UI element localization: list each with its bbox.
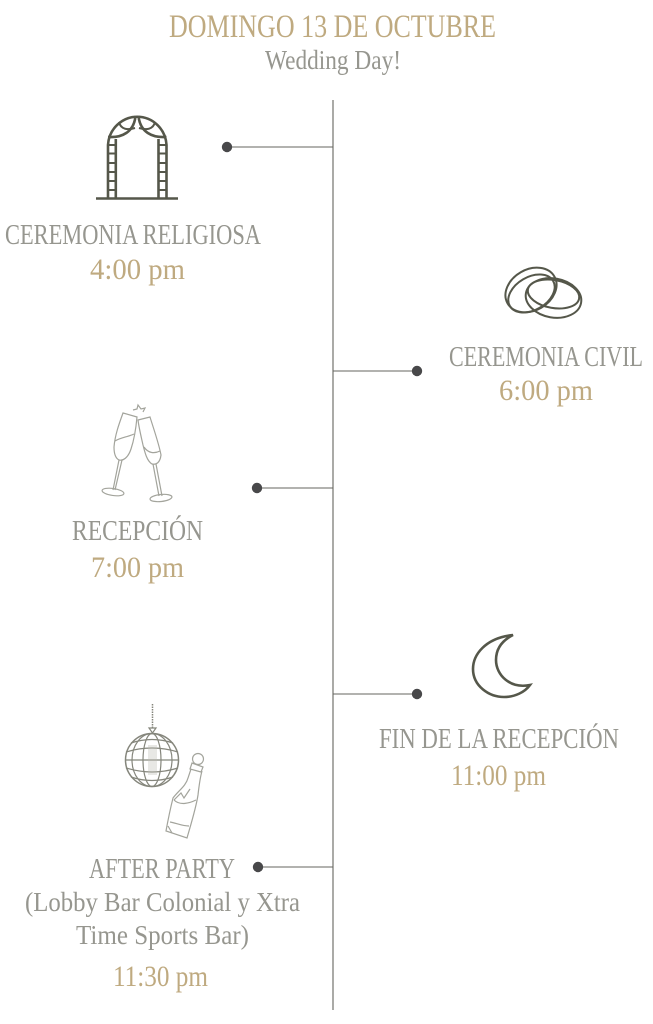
title: DOMINGO 13 DE OCTUBRE — [169, 9, 496, 45]
connector and dot — [222, 142, 333, 152]
label: recepcion: RECEPCIÓN — [72, 516, 203, 547]
panel: fin de la recepcion — [333, 635, 619, 792]
label: ceremonia religiosa: CEREMONIA RELIGIOSA — [5, 220, 262, 251]
connector and dot — [253, 862, 333, 872]
icon: champagne bottle — [166, 754, 204, 838]
icon: wedding rings — [497, 259, 584, 322]
timeline vertical axis — [332, 100, 334, 1010]
time: 4:00 pm: 4:00 pm — [90, 253, 185, 286]
panel: recepcion — [72, 405, 333, 584]
icon: wedding arch — [96, 116, 178, 198]
panel: ceremonia civil — [333, 259, 643, 407]
location line 1: (Lobby Bar Colonial y Xtra — [25, 887, 300, 917]
connector and dot — [333, 689, 422, 699]
location line 2: Time Sports Bar) — [76, 920, 249, 950]
panel: ceremonia religiosa — [5, 116, 333, 286]
connector and dot — [333, 366, 422, 376]
time: 11:30 pm: 11:30 pm — [113, 960, 208, 993]
time: 6:00 pm: 6:00 pm — [499, 374, 593, 407]
label: after party: AFTER PARTY — [89, 854, 235, 885]
subtitle: Wedding Day! — [265, 45, 401, 75]
icon: champagne flutes — [102, 405, 172, 503]
time: 11:00 pm: 11:00 pm — [451, 759, 546, 792]
icon: crescent moon — [473, 635, 530, 697]
icon: disco ball — [126, 704, 178, 786]
time: 7:00 pm: 7:00 pm — [91, 551, 184, 584]
panel: after party — [25, 704, 333, 993]
connector and dot — [252, 483, 333, 493]
